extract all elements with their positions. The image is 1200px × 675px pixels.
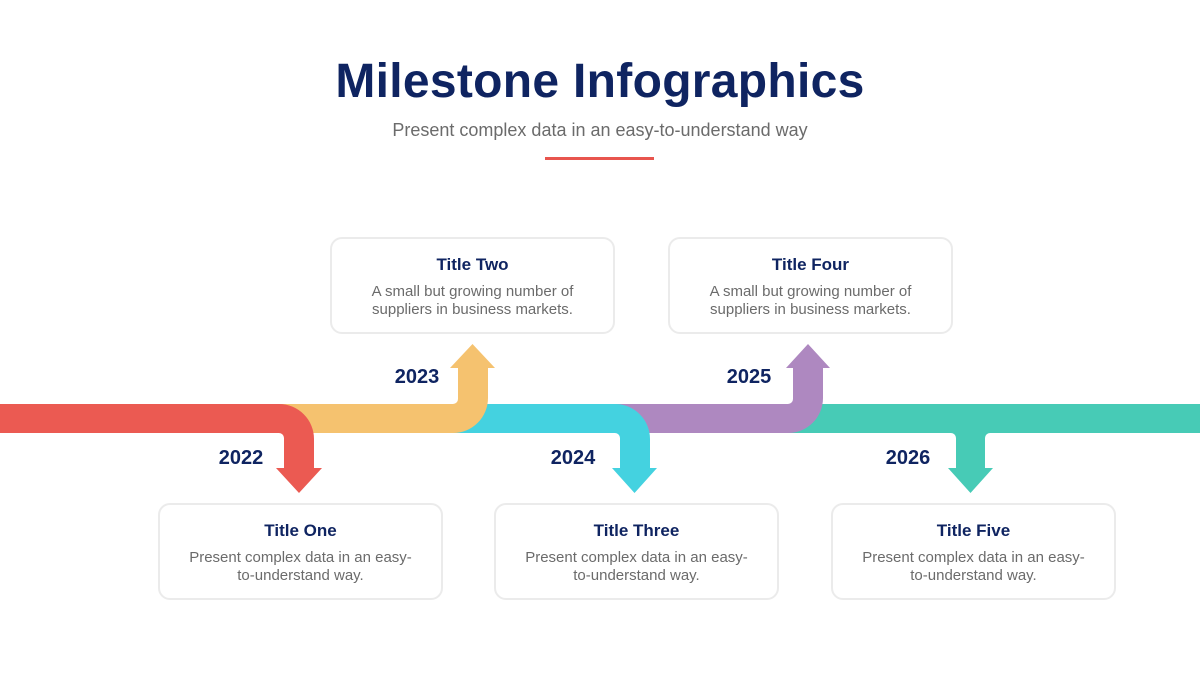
box: Title Three: Title Three xyxy=(594,521,679,540)
box: Title Three: Present complex data in an easy- xyxy=(525,549,748,566)
subtitle: Present complex data in an easy-to-understand way xyxy=(392,120,808,140)
arrow: green 2026 xyxy=(770,404,1200,493)
box: Title Four: A small but growing number of xyxy=(710,283,911,300)
title: Milestone Infographics xyxy=(335,55,865,108)
year 2026: 2026 xyxy=(886,447,930,469)
box: Title Two: suppliers in business markets. xyxy=(372,301,573,318)
box: Title One: Title One xyxy=(264,521,337,540)
box: Title One: Present complex data in an easy- xyxy=(189,549,412,566)
box: Title Five: to-understand way. xyxy=(910,567,1037,584)
year 2024: 2024 xyxy=(551,447,595,469)
year 2022: 2022 xyxy=(219,447,263,469)
box: Title Three xyxy=(494,503,779,600)
red underline xyxy=(545,157,654,160)
box: Title Five xyxy=(831,503,1116,600)
box: Title Two: A small but growing number of xyxy=(372,283,573,300)
box: Title Two: Title Two xyxy=(436,255,509,274)
box: Title Two xyxy=(330,237,615,334)
box: Title Five: Present complex data in an easy- xyxy=(862,549,1085,566)
arrow: yellow 2023 xyxy=(275,344,495,433)
box: Title Four: suppliers in business markets. xyxy=(710,301,911,318)
box: Title Four: Title Four xyxy=(772,255,849,274)
box: Title Four xyxy=(668,237,953,334)
arrow: cyan 2024 xyxy=(435,404,657,493)
box: Title Three: to-understand way. xyxy=(573,567,700,584)
box: Title Five: Title Five xyxy=(937,521,1010,540)
box: Title One xyxy=(158,503,443,600)
year 2025: 2025 xyxy=(727,366,771,388)
arrow: red 2022 xyxy=(0,404,322,493)
year 2023: 2023 xyxy=(395,366,439,388)
box: Title One: to-understand way. xyxy=(237,567,364,584)
arrow: purple 2025 xyxy=(610,344,830,433)
